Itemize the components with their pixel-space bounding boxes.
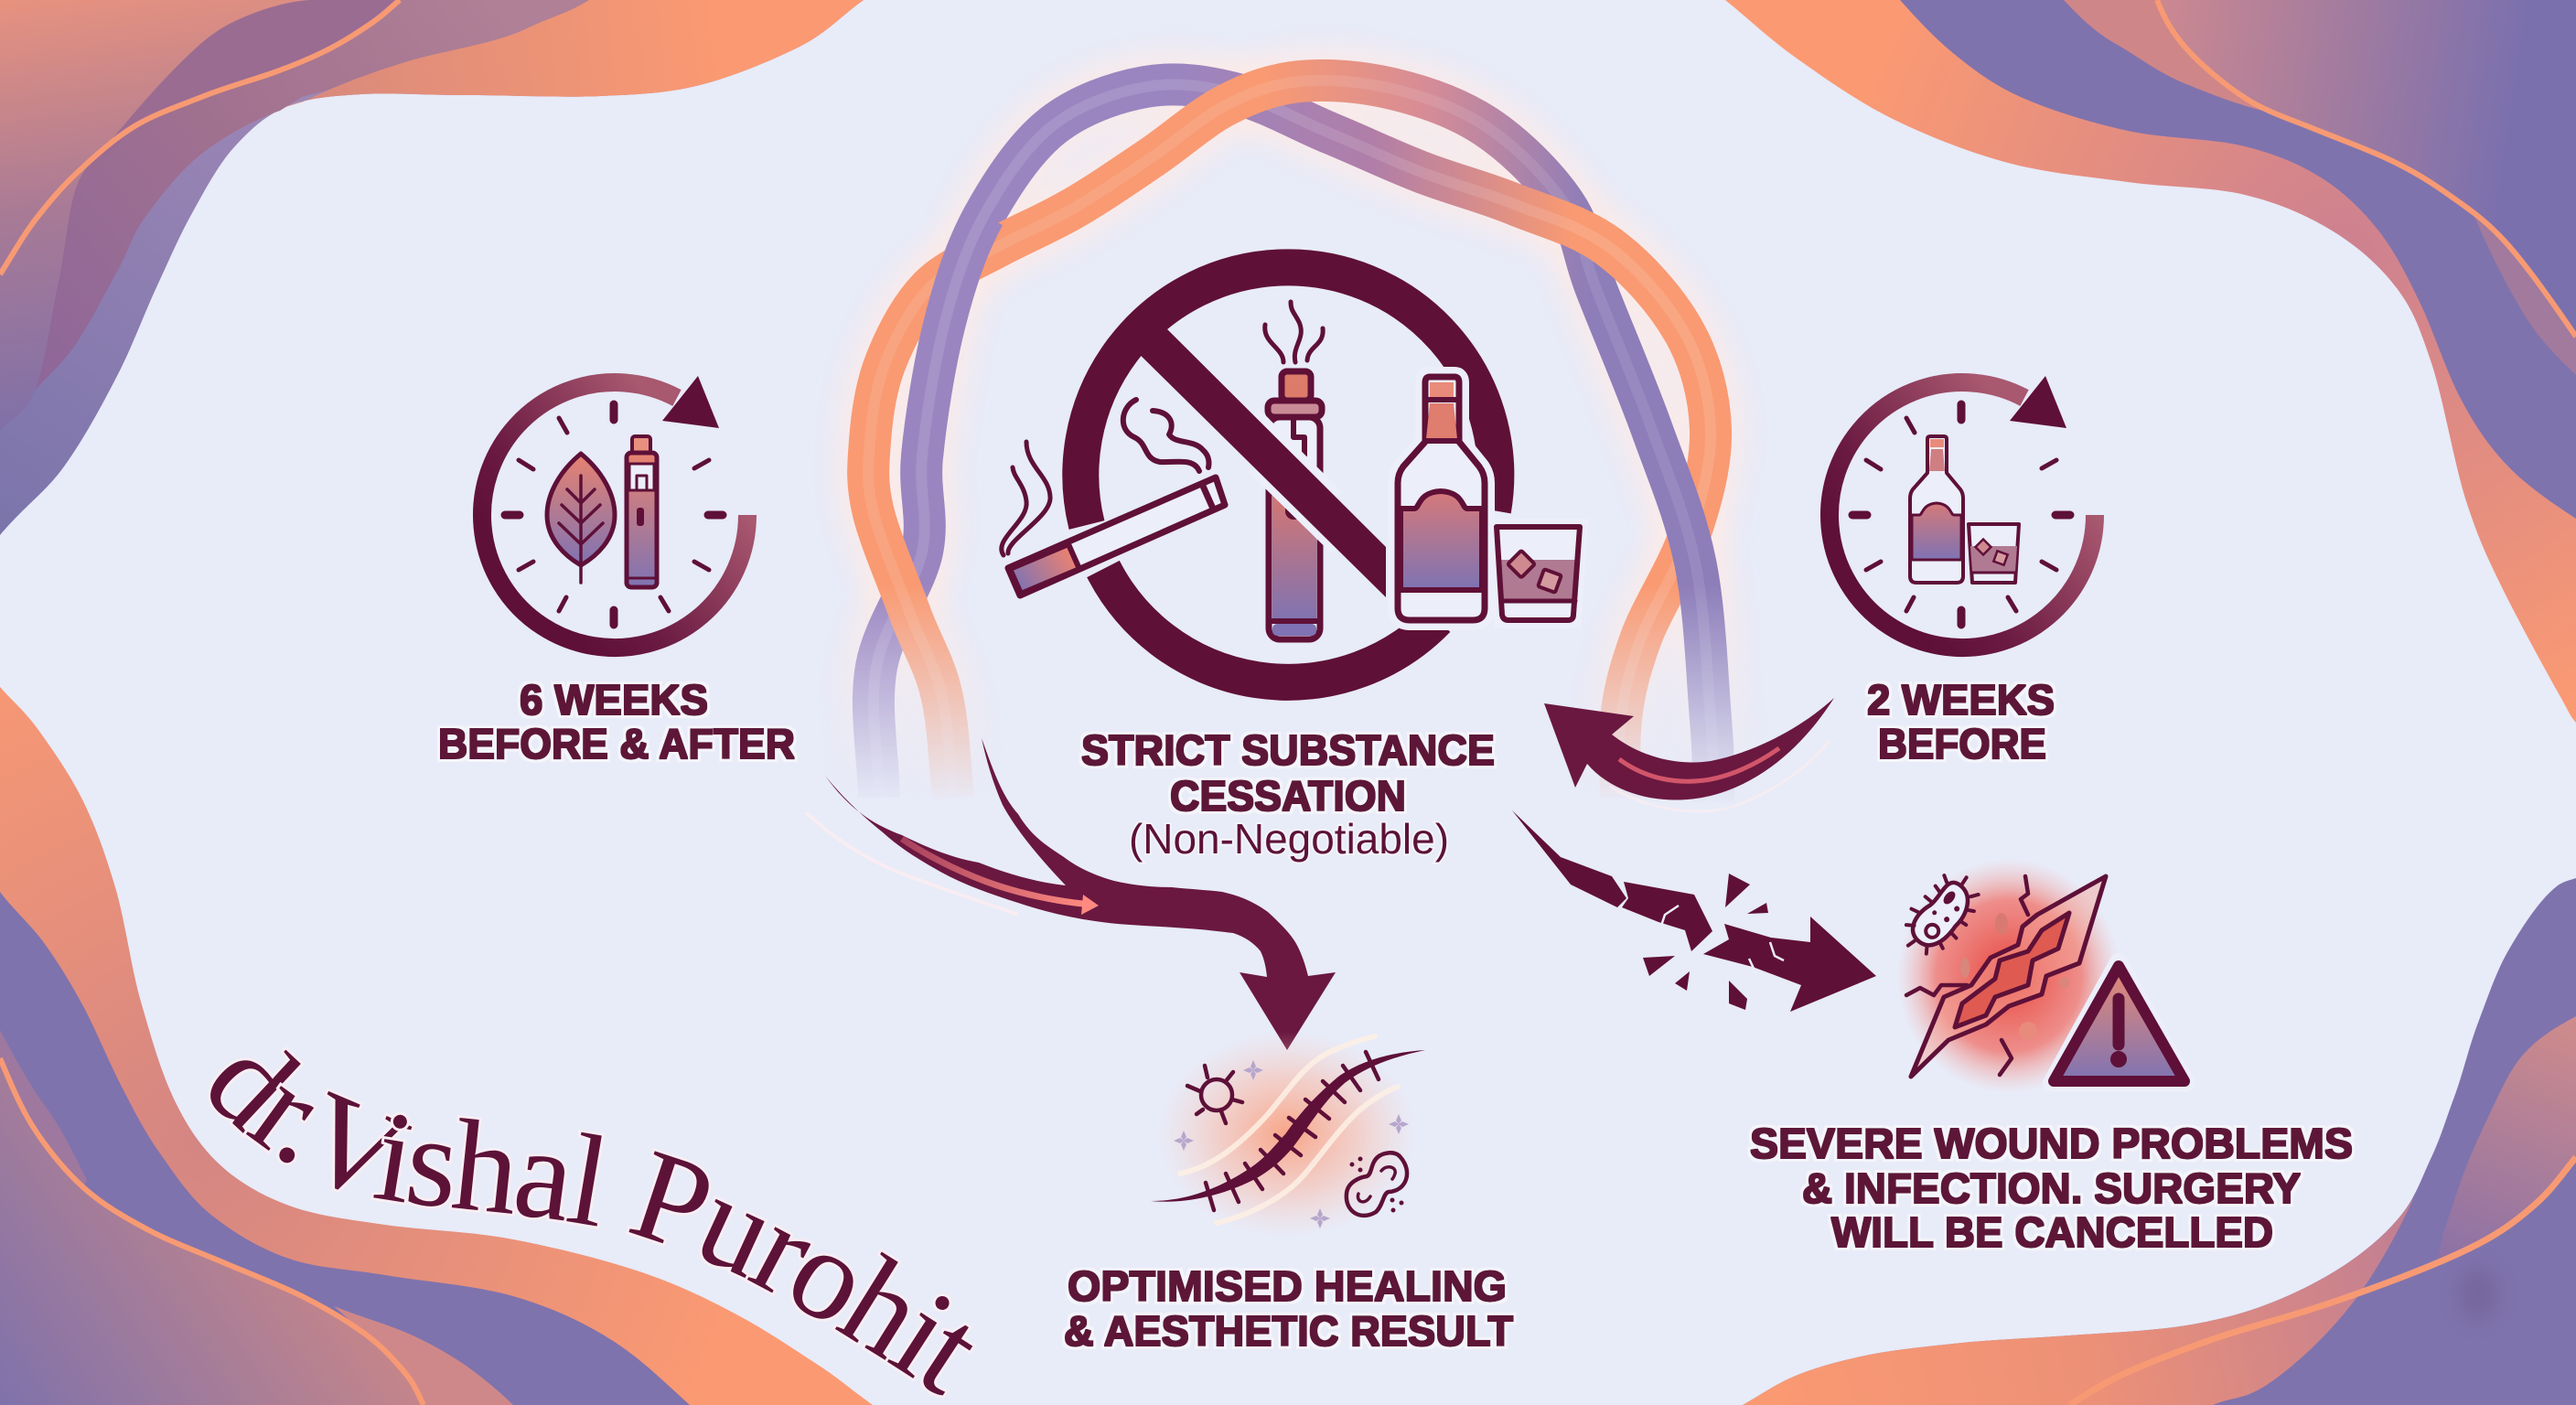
icon: healed sutured scar <box>1151 1032 1425 1237</box>
arrow: from two weeks back to centre <box>1544 698 1834 811</box>
icon: small glass <box>1969 524 2019 583</box>
heading: strict substance cessation: STRICT SUBSTANCE <box>1081 726 1495 774</box>
icon: small vape <box>627 436 657 587</box>
label: severe wound problems: WILL BE CANCELLED <box>1831 1208 2273 1256</box>
icon: whisky glass <box>1497 527 1580 620</box>
label: optimised healing: OPTIMISED HEALING <box>1068 1262 1507 1310</box>
clock ticks <box>1852 404 2070 625</box>
prohibition bar <box>1123 313 1386 597</box>
icon: infected wound with bacterium and warning <box>1892 859 2186 1093</box>
label: optimised healing <box>1064 1262 1513 1355</box>
heading: strict substance cessation: CESSATION <box>1170 772 1406 820</box>
label: six weeks before and after: 6 WEEKS <box>520 676 708 724</box>
corner wave: top right <box>1725 0 2576 723</box>
sparkles <box>1174 1060 1409 1228</box>
stitches <box>1206 1052 1379 1210</box>
icon: six week clock with leaf and vape <box>482 376 747 648</box>
arrow: broken arrow to wound complications <box>1512 810 1876 1012</box>
healing glow <box>1159 1032 1415 1237</box>
icon: small bottle <box>1910 436 1963 583</box>
ribbon crossings <box>922 205 1683 456</box>
label: six weeks before and after: BEFORE & AFTER <box>438 720 795 767</box>
icon: sun <box>1187 1066 1242 1123</box>
clock arc with arrow <box>1830 376 2095 648</box>
label: two weeks before <box>1867 676 2055 767</box>
icon: two week clock with bottle and glass <box>1830 376 2095 648</box>
scar line <box>1151 1050 1425 1202</box>
clock ticks <box>505 404 723 625</box>
corner wave: bottom left <box>0 687 873 1405</box>
icon: bacterium <box>1892 863 1991 966</box>
icon: whisky bottle <box>1398 377 1485 620</box>
label: two weeks before: 2 WEEKS <box>1867 676 2055 724</box>
label: severe wound problems: SEVERE WOUND PROBLEMS <box>1750 1120 2353 1167</box>
red inflammation glow <box>1897 859 2120 1093</box>
label: six weeks before and after <box>438 676 795 767</box>
icon: warning triangle <box>2052 962 2186 1083</box>
icon: healthy cell <box>1347 1153 1407 1216</box>
corner wave: bottom right <box>1743 878 2576 1405</box>
icon: tobacco leaf <box>547 454 615 583</box>
intertwined ribbons around central icon <box>868 80 1714 824</box>
label: severe wound problems: & INFECTION. SURGERY <box>1802 1164 2301 1212</box>
corner wave: top left <box>0 0 864 535</box>
heading: strict substance cessation <box>1081 726 1495 863</box>
label: two weeks before: BEFORE <box>1878 720 2046 767</box>
icon: vape pen <box>1265 302 1323 639</box>
label: severe wound problems <box>1750 1120 2353 1256</box>
icon: prohibition sign with cigarette, vape and alcohol <box>1002 267 1580 682</box>
heading: strict substance cessation: (Non-Negotiable) <box>1129 815 1449 863</box>
clock arc with arrow <box>482 376 747 648</box>
ribbon: purple to orange <box>874 84 1711 798</box>
wound outline <box>1906 876 2106 1077</box>
label: optimised healing: & AESTHETIC RESULT <box>1064 1307 1513 1355</box>
ribbon: orange to purple <box>868 80 1714 824</box>
arrow: from six weeks to optimised healing <box>806 738 1336 1050</box>
icon: cigarette <box>1002 400 1225 595</box>
prohibition ring <box>1080 267 1496 682</box>
